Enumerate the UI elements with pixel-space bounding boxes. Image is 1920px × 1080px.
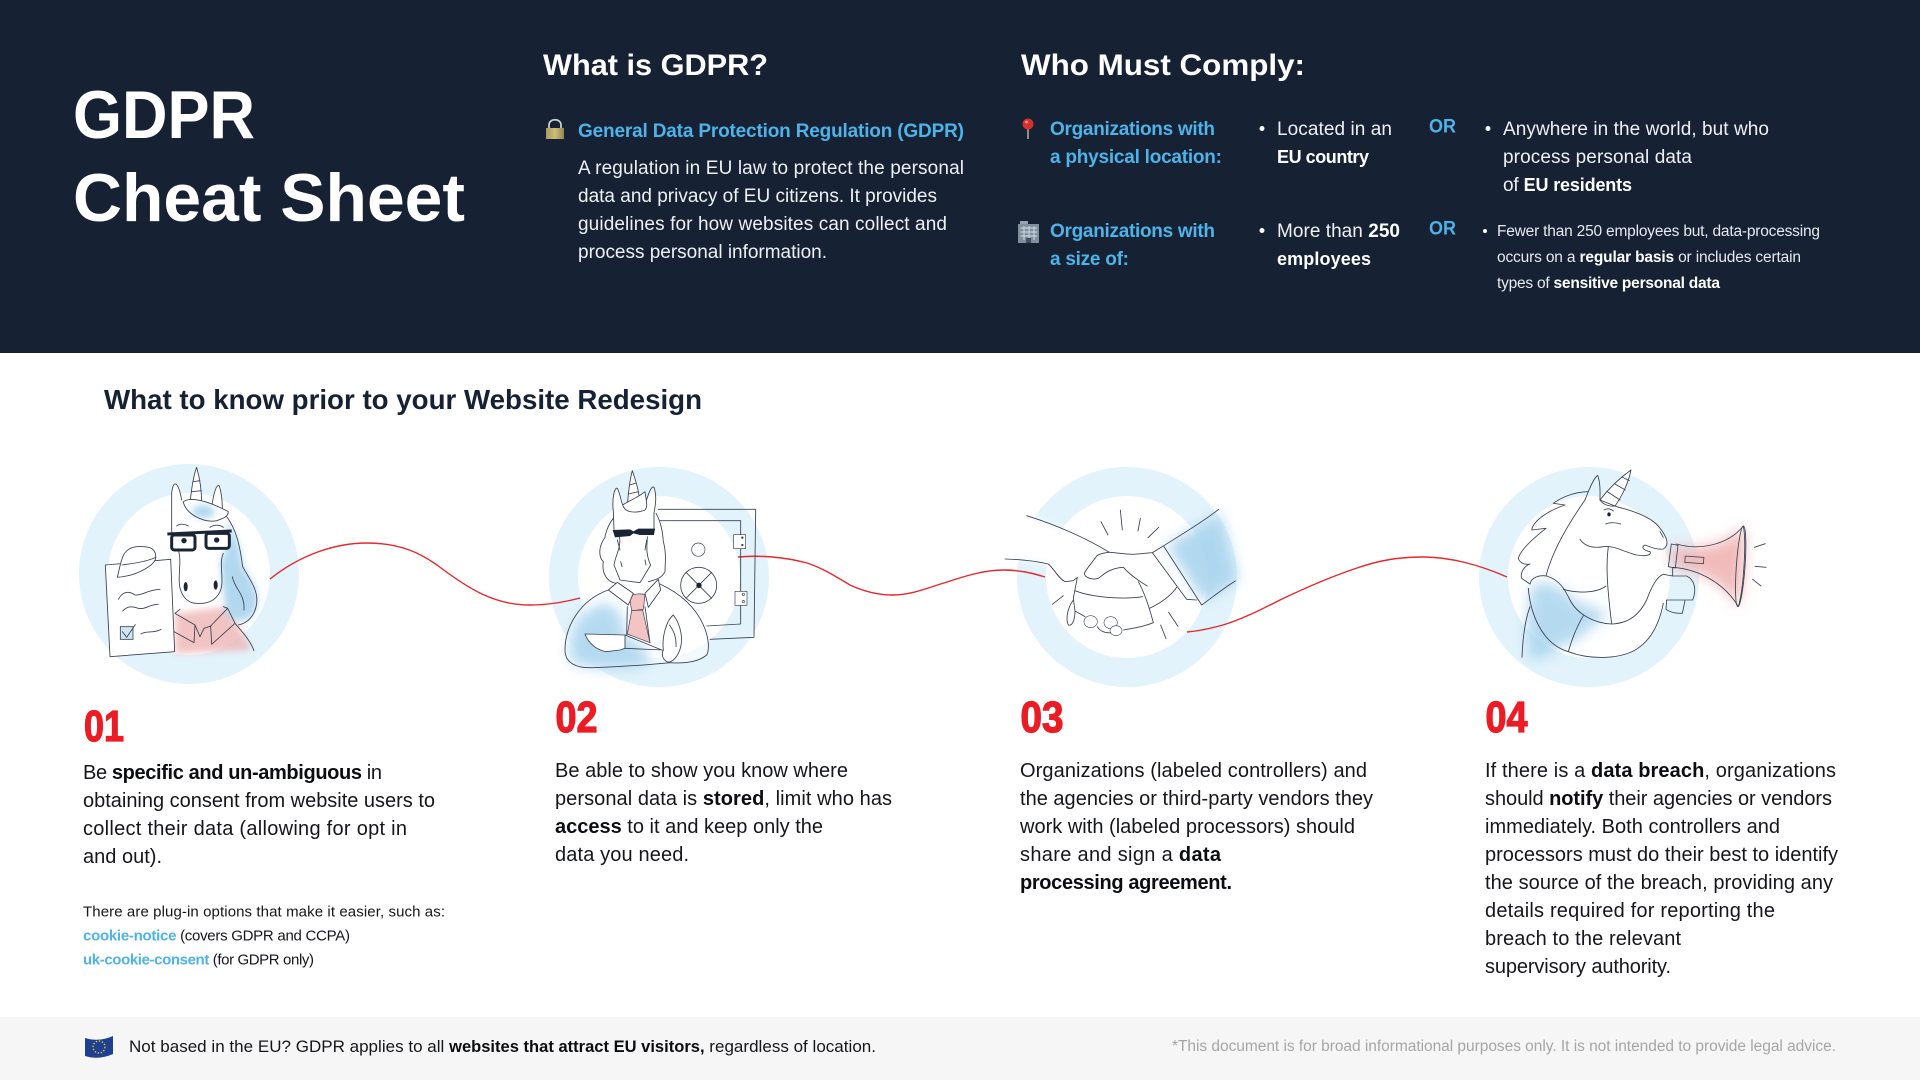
step 1 text: collect their data (allowing for opt in xyxy=(83,818,407,840)
heading: website redesign: What to know prior to your Website Redesign xyxy=(104,384,702,415)
row: organization size: More than 250 xyxy=(1277,221,1400,242)
sparkle rays xyxy=(1052,510,1178,639)
step 3 text: the agencies or third-party vendors they xyxy=(1020,788,1373,810)
connector curves xyxy=(270,543,1507,632)
plug-in note: cookie-notice (covers GDPR and CCPA) xyxy=(83,928,350,944)
step 4 text: should notify their agencies or vendors xyxy=(1485,788,1832,810)
panel: dark header xyxy=(0,0,1920,353)
number 02: 02 xyxy=(556,693,598,742)
title: Cheat Sheet xyxy=(73,160,465,236)
plug-in note: uk-cookie-consent (for GDPR only) xyxy=(83,952,314,968)
row: organization size: Organizations with xyxy=(1050,221,1215,242)
row: physical location: OR xyxy=(1429,116,1456,138)
plug-in note xyxy=(83,904,445,968)
ring: step 1 xyxy=(94,478,284,670)
shirt collar xyxy=(174,607,254,651)
row: organization size: employees xyxy=(1277,249,1371,269)
step 4 text: If there is a data breach, organizations xyxy=(1485,760,1836,782)
step 3 text xyxy=(1019,760,1373,894)
row: organization size: OR xyxy=(1429,218,1456,240)
step 3 text: work with (labeled processors) should xyxy=(1019,816,1355,838)
heading: what is GDPR: What is GDPR? xyxy=(543,49,768,82)
step 2 xyxy=(555,693,892,866)
disclaimer: *This document is for broad informational purposes only. It is not intended to provide legal advice. xyxy=(1172,1038,1836,1055)
number 03: 03 xyxy=(1020,693,1064,742)
tie and collar xyxy=(608,579,661,643)
step 3 xyxy=(1019,693,1373,894)
icon: pin xyxy=(1022,118,1034,139)
step 4 text xyxy=(1485,760,1838,978)
number 01: 01 xyxy=(84,702,124,751)
icon: EU flag xyxy=(85,1036,113,1058)
row: organization size: occurs on a regular basis or includes certain xyxy=(1497,249,1801,266)
illustration: handshake xyxy=(1005,509,1238,639)
fingers xyxy=(1084,616,1122,636)
step 1 text xyxy=(83,762,435,868)
GDPR definition: guidelines for how websites can collect and xyxy=(578,214,947,235)
step 4 text: the source of the breach, providing any xyxy=(1485,872,1833,894)
ring: step 4 xyxy=(1494,482,1684,672)
plug-in note: There are plug-in options that make it easier, such as: xyxy=(83,904,445,920)
row: physical location: Anywhere in the world, but who xyxy=(1503,119,1769,140)
clipboard xyxy=(105,546,175,657)
folded arms xyxy=(585,615,681,662)
illustration: unicorn with safe xyxy=(565,471,756,669)
number 04: 04 xyxy=(1486,693,1528,742)
head and mane xyxy=(600,471,665,583)
heading: who must comply: Who Must Comply: xyxy=(1021,49,1305,82)
safe xyxy=(658,509,756,639)
step 1 text: Be specific and un-ambiguous in xyxy=(83,762,382,784)
row: organization size: types of sensitive personal data xyxy=(1497,275,1720,292)
icon: lock xyxy=(546,120,564,139)
row: physical location: Located in an xyxy=(1277,119,1392,140)
GDPR definition: process personal information. xyxy=(578,242,827,263)
step 3 text: processing agreement. xyxy=(1020,872,1232,894)
step 2 text: personal data is stored, limit who has xyxy=(555,788,892,810)
suit body xyxy=(565,584,708,669)
step 2 text xyxy=(555,760,892,866)
ring: step 3 xyxy=(1032,482,1222,672)
unicorn head xyxy=(167,467,257,625)
row: physical location: EU country xyxy=(1277,147,1369,167)
panel: footer xyxy=(0,1017,1920,1080)
illustration: unicorn with checklist xyxy=(105,467,257,657)
step 2 text: access to it and keep only the xyxy=(555,816,823,838)
row: organization size xyxy=(1050,218,1820,292)
GDPR definition xyxy=(578,121,964,263)
step 4 text: breach to the relevant xyxy=(1485,928,1681,950)
row: physical location: a physical location: xyxy=(1050,147,1222,168)
step 4 text: immediately. Both controllers and xyxy=(1485,816,1780,838)
step 3 text: share and sign a data xyxy=(1020,844,1222,866)
icon: building xyxy=(1018,221,1039,243)
megaphone xyxy=(1666,526,1766,613)
step 3 text: Organizations (labeled controllers) and xyxy=(1020,760,1367,782)
row: physical location xyxy=(1050,116,1769,196)
row: organization size: a size of: xyxy=(1050,249,1129,270)
row: physical location: process personal data xyxy=(1503,147,1692,168)
row: physical location: of EU residents xyxy=(1503,175,1632,196)
step 1 xyxy=(83,702,445,968)
illustration: unicorn with megaphone xyxy=(1518,470,1766,660)
GDPR definition: A regulation in EU law to protect the personal xyxy=(578,158,964,179)
title xyxy=(73,77,465,236)
title: GDPR xyxy=(73,77,255,153)
step 2 text: Be able to show you know where xyxy=(555,760,848,782)
step 1 text: obtaining consent from website users to xyxy=(83,790,435,812)
step 4 text: processors must do their best to identify xyxy=(1485,844,1838,866)
ring: step 2 xyxy=(564,482,754,672)
step 2 text: data you need. xyxy=(555,844,689,866)
row: physical location: Organizations with xyxy=(1050,119,1215,140)
step 4 text: supervisory authority. xyxy=(1485,956,1671,978)
GDPR definition: data and privacy of EU citizens. It provides xyxy=(578,186,937,207)
step 4 xyxy=(1485,693,1838,978)
step 1 text: and out). xyxy=(83,846,162,868)
unicorn neck and arm xyxy=(1518,470,1673,660)
row: organization size: Fewer than 250 employees but, data-processing xyxy=(1497,223,1820,240)
footer note: Not based in the EU? GDPR applies to all websites that attract EU visitors, regardless of location. xyxy=(129,1037,876,1056)
GDPR definition: General Data Protection Regulation (GDPR) xyxy=(578,121,964,142)
step 4 text: details required for reporting the xyxy=(1485,900,1775,922)
